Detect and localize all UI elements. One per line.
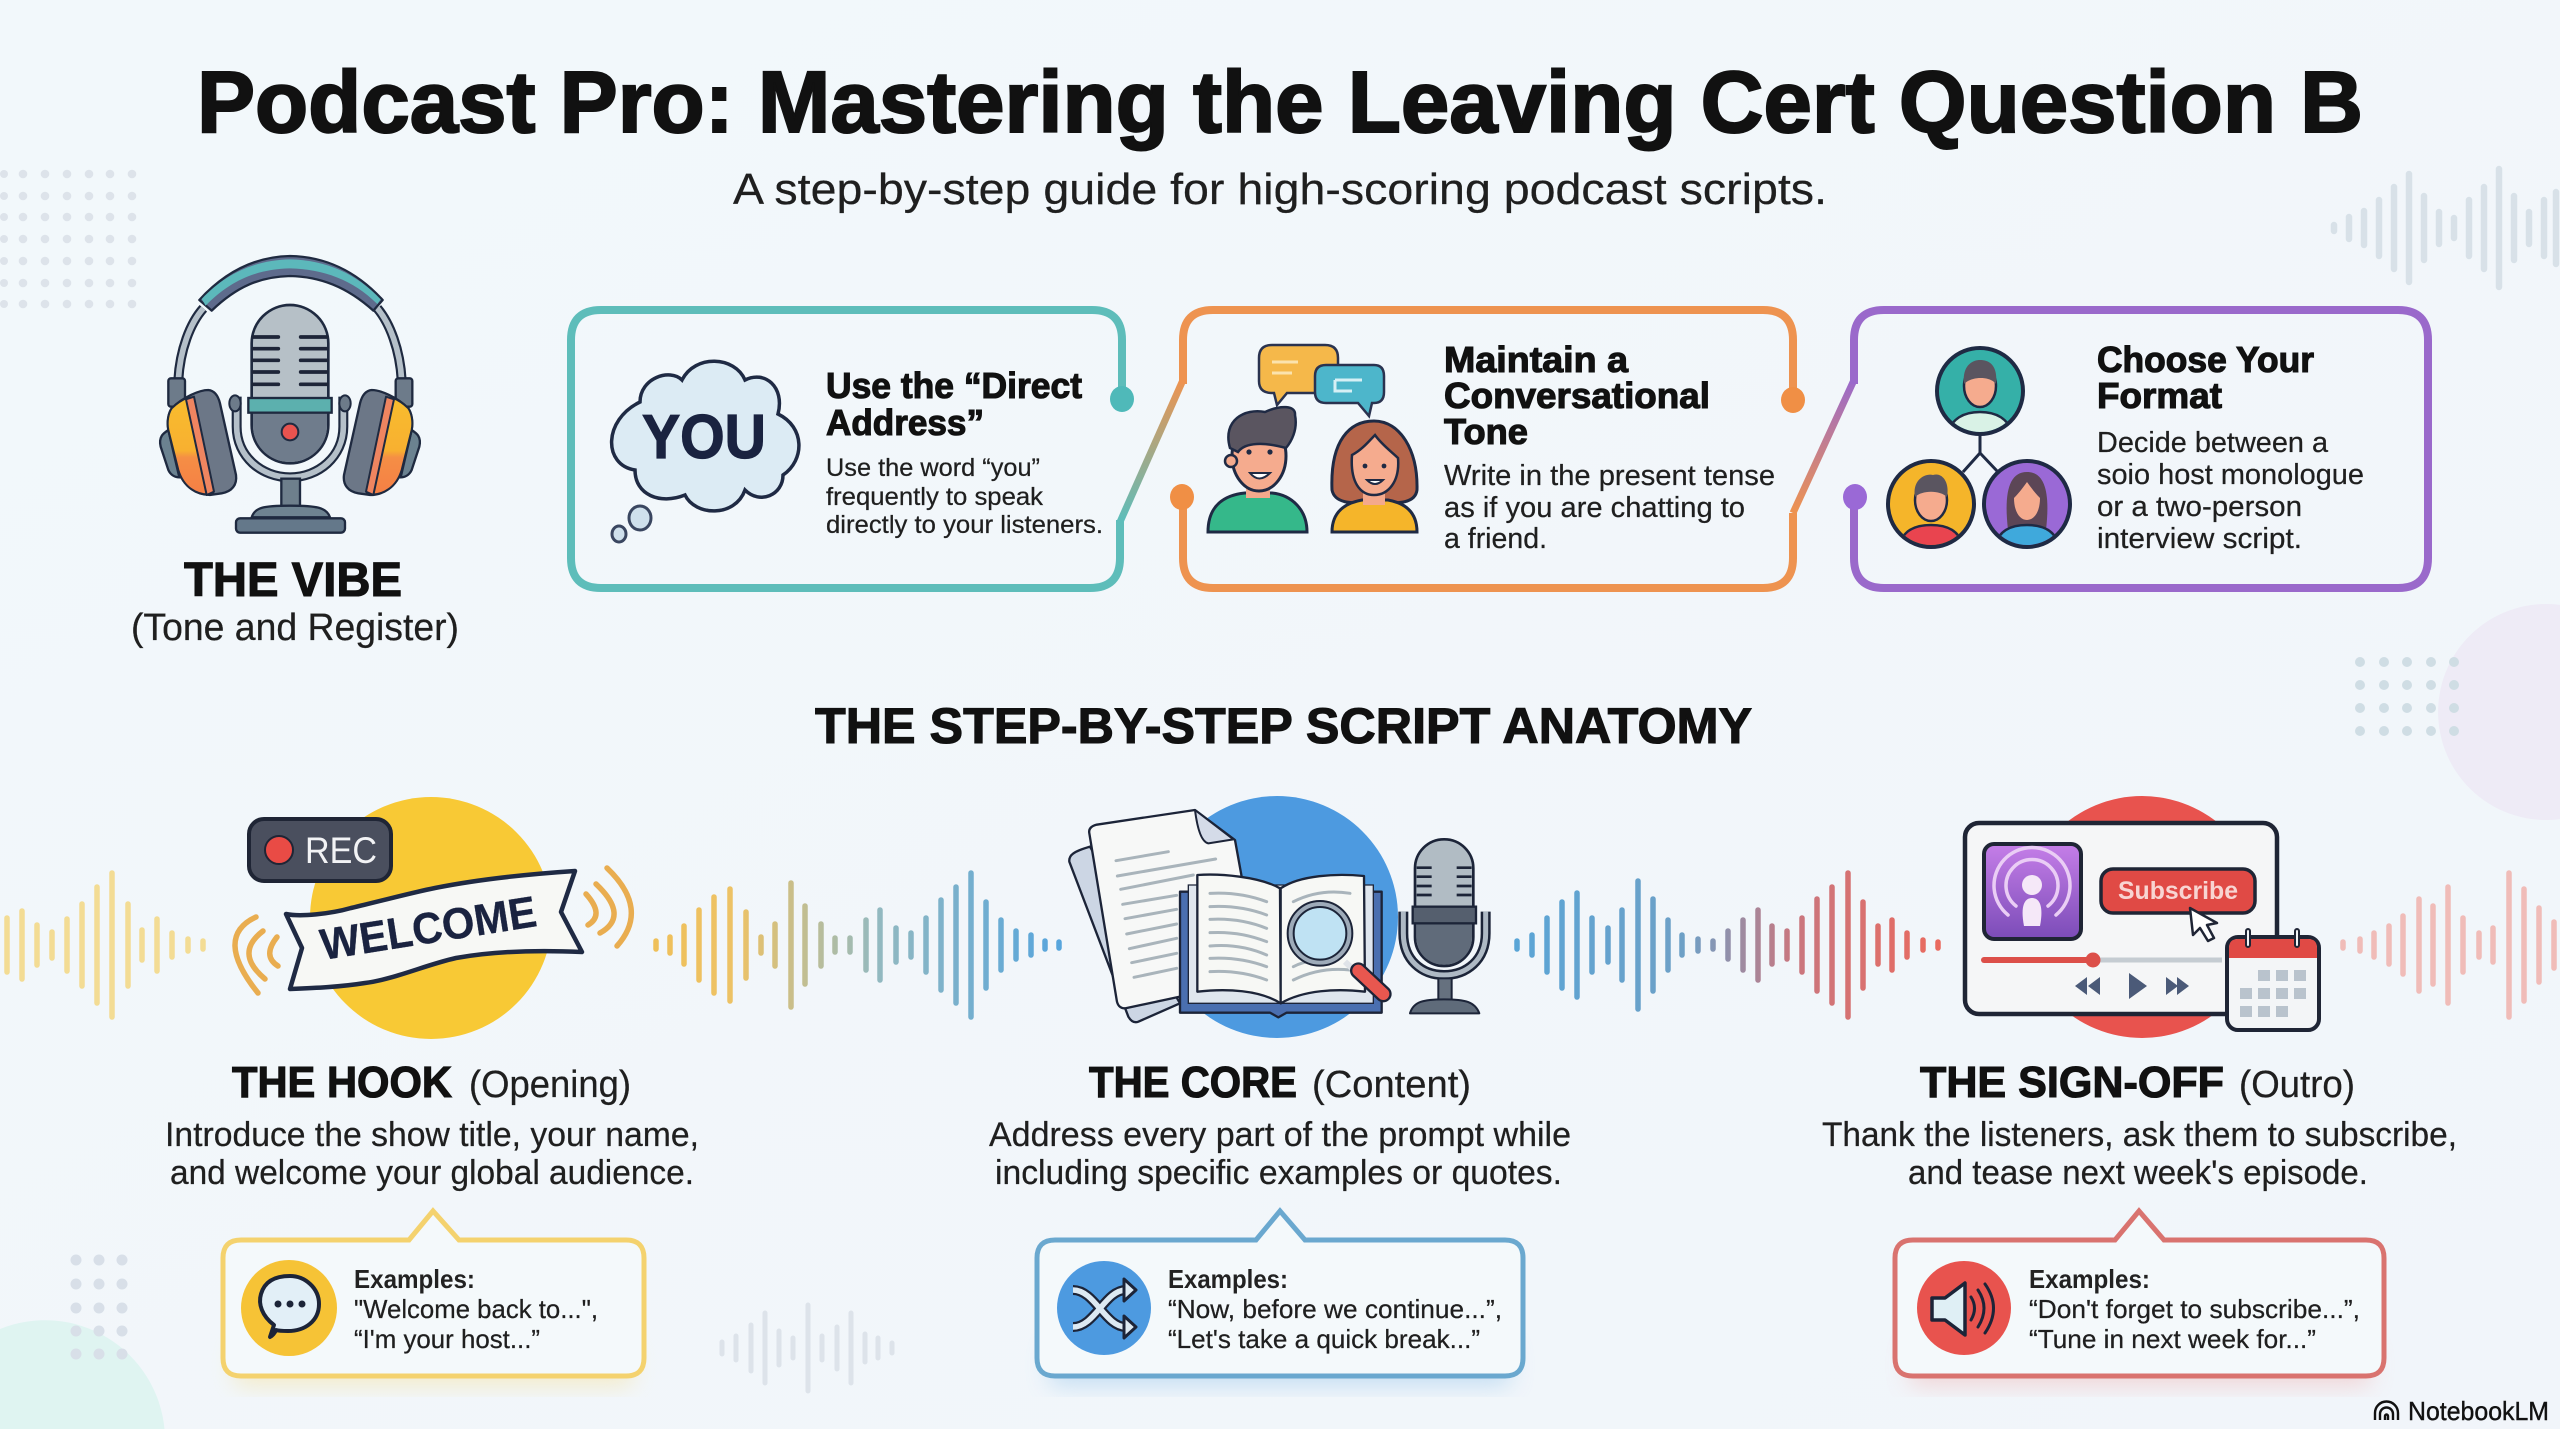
text: conversational tone body: as if you are chatting to xyxy=(1444,492,1745,524)
connector dot: purple xyxy=(1843,484,1867,510)
icon: welcome banner with rec badge xyxy=(235,797,631,1039)
callout: hook examples: "Welcome back to...", xyxy=(354,1294,598,1324)
callout: sign-off examples: “Don't forget to subscribe...”, xyxy=(2029,1294,2360,1324)
text: choose format body xyxy=(2097,427,2364,555)
heading: the hook xyxy=(232,1058,631,1107)
heading: direct address: Address” xyxy=(826,402,984,443)
text: tone and register: (Tone and Register) xyxy=(131,607,459,649)
heading: conversational tone: Maintain a xyxy=(1444,339,1629,380)
connector dot: teal xyxy=(1110,386,1134,412)
panel: the core xyxy=(989,796,1571,1385)
callout: hook examples xyxy=(223,1211,644,1385)
subtitle: A step-by-step guide for high-scoring podcast scripts. xyxy=(733,165,1827,214)
title: Podcast Pro: Mastering the Leaving Cert Question B xyxy=(197,54,2363,151)
heading: the sign-off: THE SIGN-OFF xyxy=(1920,1058,2224,1107)
text: hook description: Introduce the show title, your name, xyxy=(165,1116,699,1154)
decoration: bottom-left dot grid xyxy=(70,1254,128,1360)
text: choose format body: Decide between a xyxy=(2097,427,2329,459)
callout: core examples: “Now, before we continue...”, xyxy=(1168,1294,1502,1324)
decoration: right dot grid xyxy=(2355,657,2459,736)
heading: the sign-off: (Outro) xyxy=(2239,1064,2355,1106)
connector dot: orange left xyxy=(1170,484,1194,510)
heading: conversational tone xyxy=(1444,339,1710,452)
callout: sign-off examples: Examples: xyxy=(2029,1264,2150,1294)
icon: thought cloud xyxy=(612,361,799,542)
text: direct address body: frequently to speak xyxy=(826,483,1044,511)
text: choose format body: or a two-person xyxy=(2097,491,2302,523)
decoration: lilac circle xyxy=(2438,604,2560,820)
heading: choose format: Format xyxy=(2097,375,2222,416)
callout: sign-off examples xyxy=(1895,1211,2384,1385)
decoration: teal corner blob xyxy=(0,1320,164,1429)
card outline: purple xyxy=(1854,310,2428,588)
icon: welcome banner with rec badge: REC xyxy=(305,830,377,871)
logo: NotebookLM: NotebookLM xyxy=(2408,1396,2549,1426)
sound wave: left yellow xyxy=(7,873,203,1017)
panel: the vibe xyxy=(131,256,459,649)
heading: conversational tone: Tone xyxy=(1444,411,1528,452)
callout: hook examples: Examples: xyxy=(354,1264,475,1294)
panel: the sign-off xyxy=(1822,796,2457,1385)
icon: podcast player with subscribe and calendar: Subscribe xyxy=(2118,877,2238,905)
text: conversational tone body: Write in the present tense xyxy=(1444,460,1775,492)
text: direct address body xyxy=(826,454,1103,539)
decoration: top-right sound wave xyxy=(2334,169,2556,287)
panel: the hook xyxy=(165,797,699,1385)
text: core description: Address every part of the prompt while xyxy=(989,1116,1571,1154)
callout: hook examples: “I'm your host...” xyxy=(354,1324,540,1354)
heading: direct address: Use the “Direct xyxy=(826,365,1082,406)
decoration: top-left dot grid xyxy=(0,170,136,308)
text: hook description xyxy=(165,1116,699,1192)
text: sign-off description xyxy=(1822,1116,2457,1192)
callout: core examples: Examples: xyxy=(1168,1264,1288,1294)
heading: the core: (Content) xyxy=(1312,1064,1471,1106)
icon: microphone with headphones xyxy=(160,256,420,533)
text: direct address body: Use the word “you” xyxy=(826,454,1040,482)
card outline: orange xyxy=(1183,310,1793,588)
connector dot: orange right xyxy=(1781,387,1805,413)
icon: thought cloud: YOU xyxy=(642,403,766,472)
icon: papers, book, magnifier and mic xyxy=(1069,796,1486,1038)
arrow: connector orange to purple xyxy=(1793,380,1854,513)
icon: two people talking xyxy=(1208,345,1417,532)
text: hook description: and welcome your global audience. xyxy=(170,1154,694,1192)
section heading: THE STEP-BY-STEP SCRIPT ANATOMY xyxy=(815,698,1752,754)
text: sign-off description: Thank the listeners, ask them to subscribe, xyxy=(1822,1116,2457,1154)
heading: choose format: Choose Your xyxy=(2097,339,2314,380)
arrow: connector teal to orange xyxy=(1120,380,1183,522)
heading: the core xyxy=(1089,1058,1471,1107)
text: conversational tone body xyxy=(1444,460,1775,555)
callout: sign-off examples: “Tune in next week for...” xyxy=(2029,1324,2316,1354)
icon: welcome banner with rec badge: WELCOME xyxy=(317,887,540,970)
sound wave: yellow to blue xyxy=(656,873,1059,1017)
panel: conversational tone card xyxy=(1170,310,1805,588)
heading: direct address xyxy=(826,365,1082,443)
text: sign-off description: and tease next week's episode. xyxy=(1908,1154,2368,1192)
heading: the vibe: THE VIBE xyxy=(184,554,402,607)
icon: podcast player with subscribe and calendar xyxy=(1965,796,2319,1038)
callout: core examples xyxy=(1037,1211,1523,1385)
heading: the hook: THE HOOK xyxy=(232,1058,452,1107)
text: conversational tone body: a friend. xyxy=(1444,523,1547,555)
heading: the core: THE CORE xyxy=(1089,1058,1297,1107)
callout: core examples: “Let's take a quick break...” xyxy=(1168,1324,1480,1354)
sound wave: right pink xyxy=(2343,873,2554,1017)
text: core description: including specific examples or quotes. xyxy=(995,1154,1562,1192)
heading: the hook: (Opening) xyxy=(469,1064,631,1106)
text: direct address body: directly to your listeners. xyxy=(826,511,1103,539)
sound wave: blue to red xyxy=(1517,873,1938,1017)
decoration: bottom sound wave xyxy=(722,1305,892,1391)
heading: conversational tone: Conversational xyxy=(1444,375,1710,416)
panel: choose format card xyxy=(1843,310,2428,588)
text: core description xyxy=(989,1116,1571,1192)
panel: direct address card xyxy=(571,310,1134,588)
icon: avatars org chart xyxy=(1888,348,2070,549)
card outline: teal xyxy=(571,310,1122,588)
heading: choose format xyxy=(2097,339,2314,416)
text: choose format body: interview script. xyxy=(2097,523,2302,555)
text: choose format body: soio host monologue xyxy=(2097,459,2364,491)
